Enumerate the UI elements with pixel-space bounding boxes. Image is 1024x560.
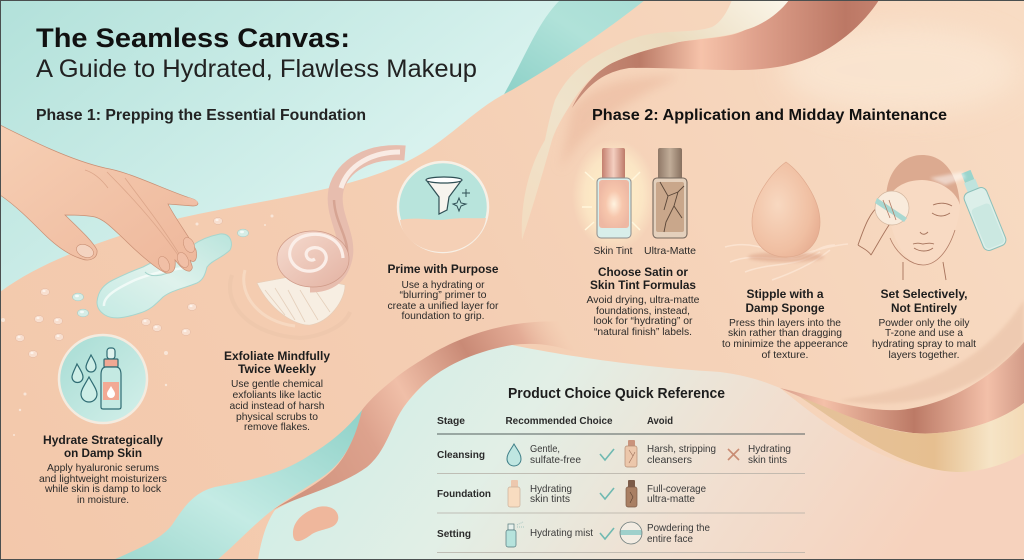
row: setting: Hydrating mist — [530, 528, 593, 539]
water droplets on skin — [1, 214, 274, 436]
copper ribbon right — [780, 342, 1024, 433]
row: foundation: ultra-matte — [647, 494, 695, 505]
icon: ultra-matte bottle — [653, 148, 687, 238]
top cream ribbon — [522, 0, 789, 240]
row: cleansing: Harsh, stripping — [647, 444, 716, 455]
text: set: Powder only the oily — [878, 318, 970, 329]
text: prime: create a unified layer for — [388, 301, 499, 312]
text: prime: “blurring” primer to — [400, 290, 487, 301]
icon: funnel primer — [398, 162, 488, 252]
text: choose — [586, 265, 700, 338]
hand — [0, 125, 199, 273]
text: prime: Use a hydrating or — [402, 280, 485, 291]
text: choose: Avoid drying, ultra-matte — [586, 295, 700, 306]
row: foundation: skin tints — [530, 494, 570, 505]
table header: Stage — [437, 416, 465, 427]
text: stipple: Stipple with a — [746, 287, 824, 301]
row: cleansing: sulfate-free — [530, 455, 581, 466]
text: stipple: Press thin layers into the — [729, 318, 841, 329]
text: choose: look for “hydrating” or — [594, 316, 693, 327]
peach bean blob — [293, 506, 338, 541]
table panel background — [258, 345, 1024, 560]
text: stipple: to minimize the appeerance — [722, 339, 848, 350]
text: prime — [388, 262, 499, 322]
exfoliating brush — [230, 152, 405, 338]
icon: face with puff and spray — [858, 155, 1008, 280]
table: product choice quick reference — [437, 385, 805, 552]
row: cleansing: Hydrating — [748, 444, 791, 455]
text: exfoliate: physical scrubs to — [236, 412, 318, 423]
soft highlight on right skin — [780, 25, 1020, 115]
text: prime: Prime with Purpose — [388, 262, 499, 276]
text: exfoliate: Use gentle chemical — [231, 379, 323, 390]
heading: phase 2: Phase 2: Application and Midday Maintenance — [592, 107, 947, 124]
text: exfoliate: exfoliants like lactic — [232, 390, 322, 401]
text: choose: “natural finish” labels. — [594, 327, 692, 338]
text: choose: foundations, instead, — [596, 306, 690, 317]
mint wave bottom — [113, 410, 362, 560]
text: hydrate: and lightweight moisturizers — [39, 474, 167, 485]
table header — [437, 416, 673, 427]
icon: serum and drops — [59, 335, 147, 423]
title: A Guide to Hydrated, Flawless Makeup — [36, 55, 477, 83]
text: hydrate: on Damp Skin — [64, 446, 142, 460]
text: set: Set Selectively, — [880, 287, 968, 301]
row: setting: entire face — [647, 534, 693, 545]
gold ribbon right — [800, 397, 1024, 472]
text: set: hydrating spray to malt — [872, 339, 976, 350]
skin shading under phase 2 — [840, 300, 1024, 404]
text: exfoliate — [224, 349, 330, 433]
text: exfoliate: Exfoliate Mindfully — [224, 349, 330, 363]
heading: phase 1: Phase 1: Prepping the Essential Foundation — [36, 107, 366, 124]
row: cleansing: cleansers — [647, 455, 692, 466]
row: foundation — [437, 480, 706, 507]
text: stipple — [722, 287, 848, 361]
text: exfoliate: acid instead of harsh — [230, 401, 324, 412]
row: foundation: Full-coverage — [647, 484, 706, 495]
row: foundation: Foundation — [437, 489, 491, 500]
icon: skin tint bottle — [572, 139, 656, 251]
label: skin tint: Skin Tint — [594, 246, 633, 257]
text: exfoliate: remove flakes. — [244, 422, 310, 433]
text: hydrate: Hydrate Strategically — [43, 433, 163, 447]
table header: Avoid — [647, 416, 673, 427]
row: setting — [437, 522, 710, 547]
text: exfoliate: Twice Weekly — [238, 362, 316, 376]
table header: Recommended Choice — [506, 416, 613, 427]
text: set: T-zone and use a — [885, 328, 963, 339]
text: set: Not Entirely — [891, 301, 957, 315]
mint ribbon top — [495, 0, 660, 110]
row: cleansing: skin tints — [748, 455, 787, 466]
text: hydrate: in moisture. — [77, 495, 129, 506]
table title: Product Choice Quick Reference — [508, 385, 725, 402]
top copper ribbon — [572, 0, 879, 108]
copper ribbon centre — [273, 321, 575, 510]
text: hydrate — [39, 433, 167, 506]
title — [36, 23, 477, 83]
row: cleansing — [437, 440, 791, 467]
text: choose: Choose Satin or — [598, 265, 688, 279]
text: stipple: of texture. — [762, 350, 808, 361]
text: prime: foundation to grip. — [402, 311, 484, 322]
text: hydrate: Apply hyaluronic serums — [47, 463, 159, 474]
gel puddle — [97, 234, 231, 318]
title: The Seamless Canvas: — [36, 23, 350, 53]
text: stipple: skin rather than dragging — [728, 328, 842, 339]
row: foundation: Hydrating — [530, 484, 572, 495]
row: cleansing: Gentle, — [530, 444, 560, 455]
icon: sponge — [725, 162, 848, 280]
text: choose: Skin Tint Formulas — [590, 278, 696, 292]
row: setting: Setting — [437, 529, 471, 540]
row: setting: Powdering the — [647, 523, 710, 534]
text: set: layers together. — [888, 350, 960, 361]
soft shade below top ribbon — [560, 76, 680, 170]
text: hydrate: while skin is damp to lock — [44, 484, 162, 495]
text: stipple: Damp Sponge — [746, 301, 825, 315]
label: ultra-matte: Ultra-Matte — [644, 246, 696, 257]
row: cleansing: Cleansing — [437, 450, 485, 461]
text: set — [872, 287, 976, 361]
